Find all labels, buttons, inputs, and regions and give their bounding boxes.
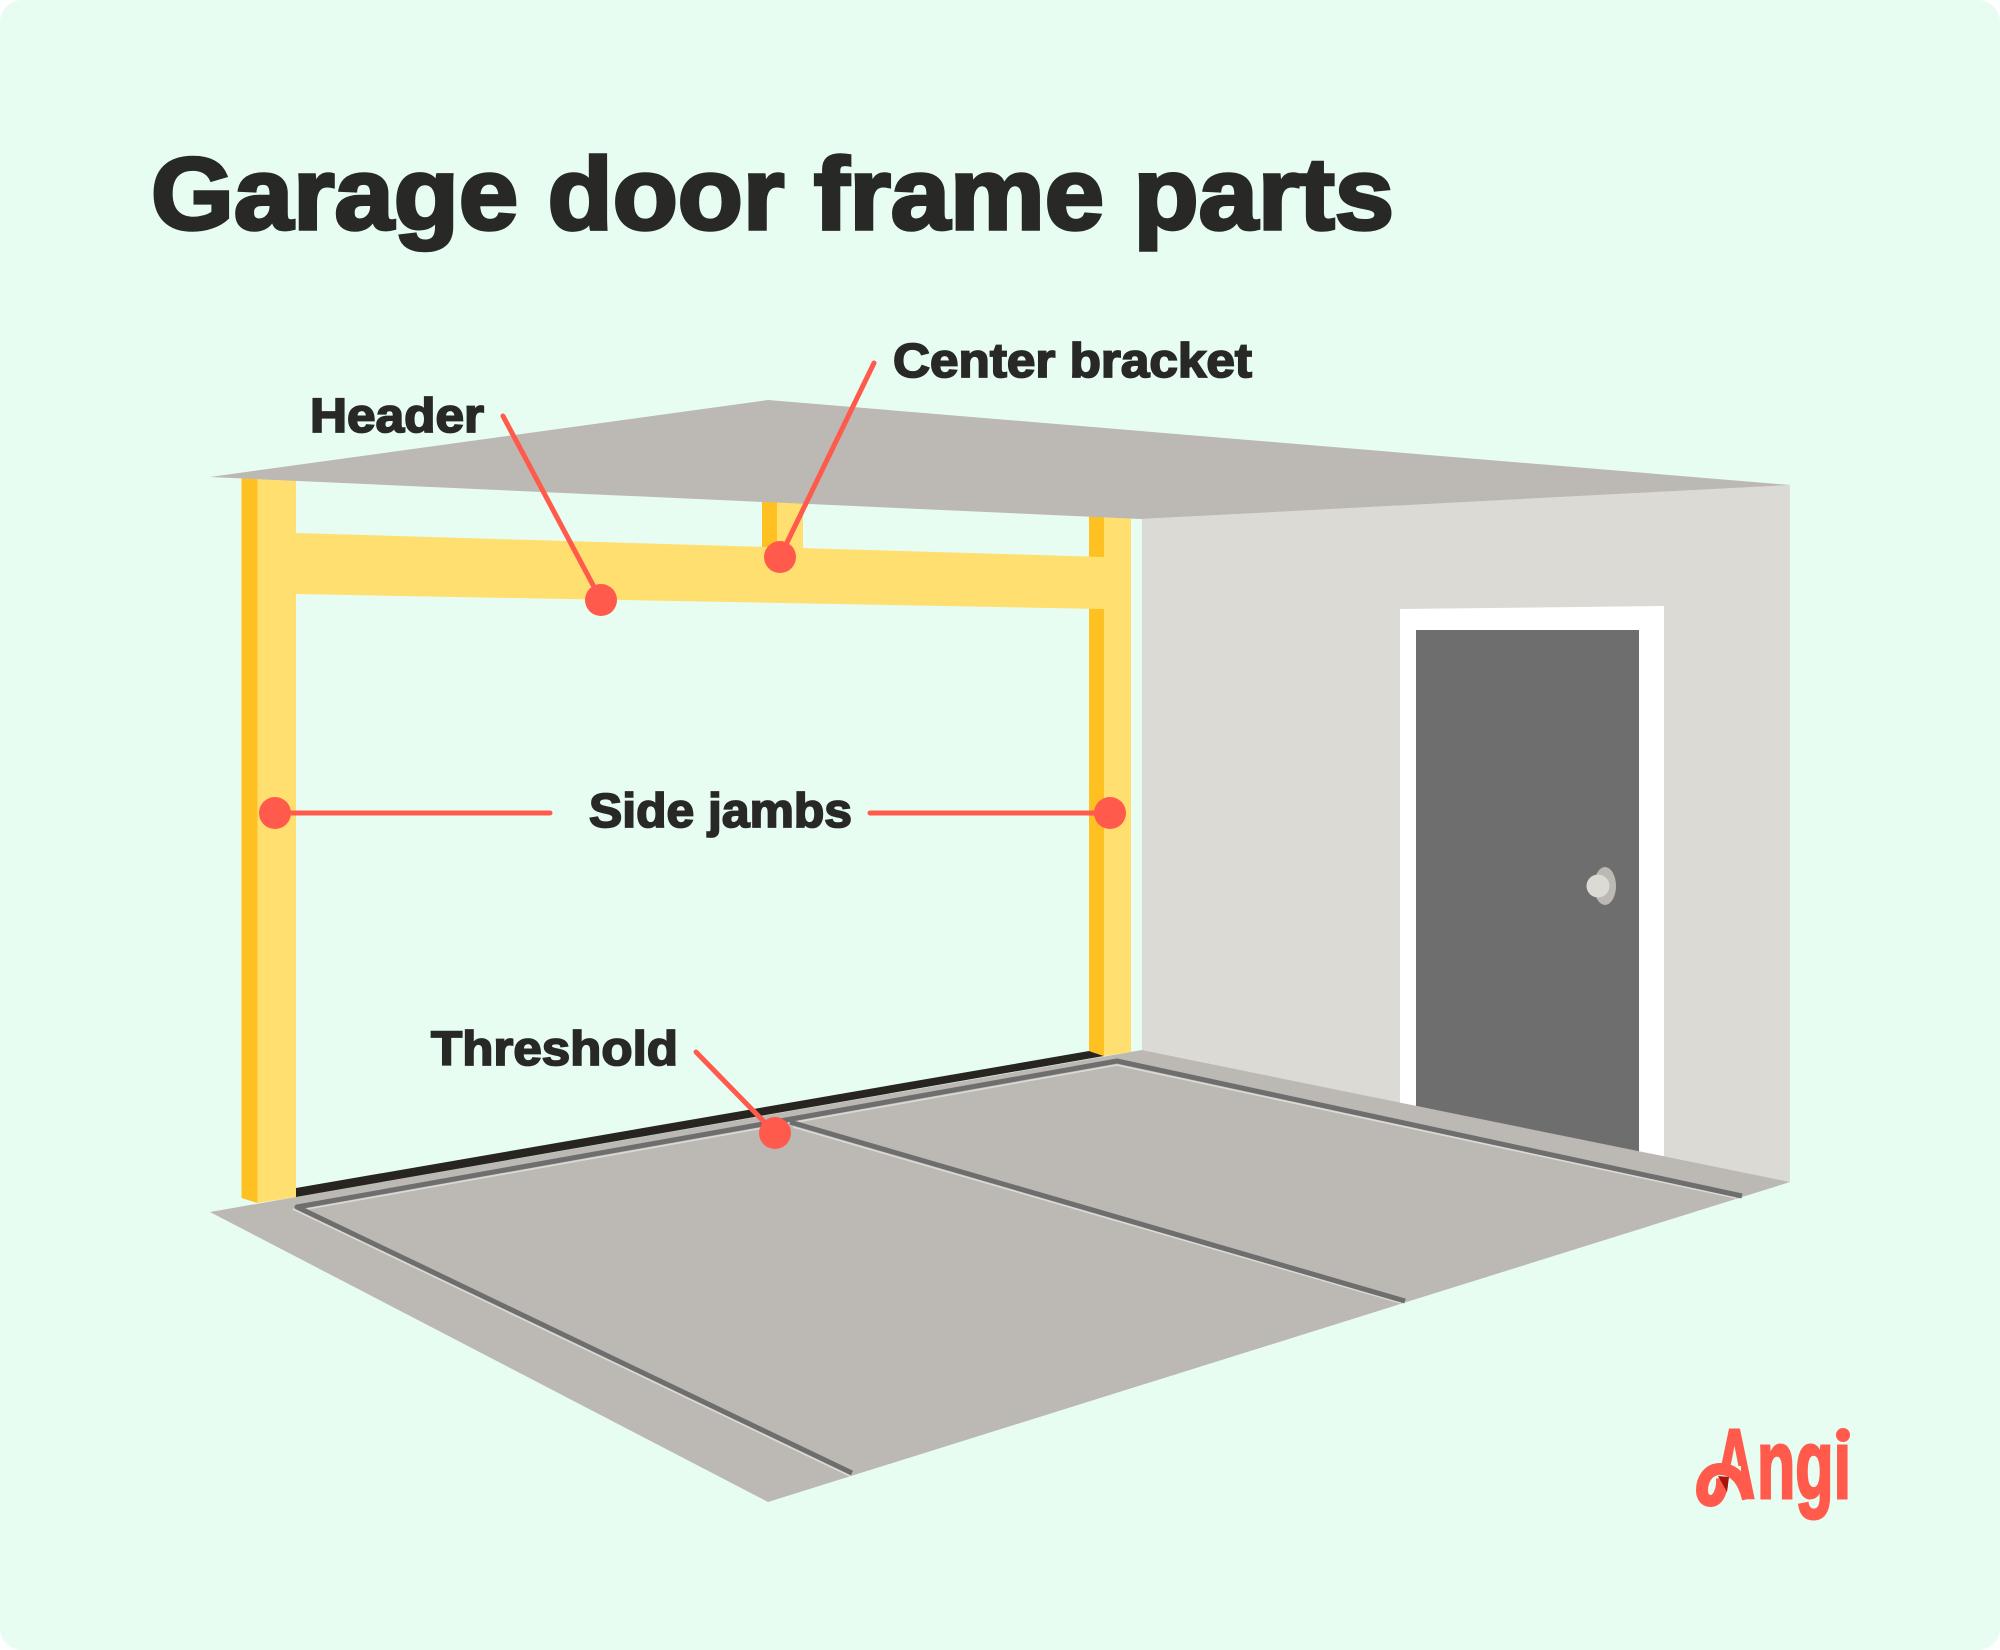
Angi logo: A [1714, 1409, 1755, 1519]
callout: header [310, 390, 617, 616]
door knob [1586, 867, 1616, 905]
left side jamb [242, 478, 296, 1203]
floor light seams [293, 1065, 1736, 1476]
callout: side jambs: Side jambs [589, 785, 852, 838]
Angi logo [1696, 1428, 1850, 1520]
threshold seal [296, 1051, 1104, 1197]
title: Garage door frame parts [151, 137, 1394, 251]
callout: center bracket [764, 335, 1252, 573]
roof [210, 400, 1790, 519]
door panel [1416, 630, 1639, 1153]
right side jamb [1089, 505, 1131, 1056]
floor grooves [297, 1061, 1742, 1473]
side wall [1142, 485, 1790, 1182]
callout: side jambs [259, 785, 1126, 838]
callout: threshold [431, 1023, 791, 1149]
callout: header: Header [310, 390, 484, 443]
Angi logo: ngi [1757, 1409, 1851, 1519]
floor [210, 1050, 1790, 1502]
door frame [1400, 606, 1664, 1160]
garage illustration [210, 400, 1790, 1502]
center bracket [762, 480, 803, 550]
callout: threshold: Threshold [431, 1023, 678, 1076]
interior door [1400, 606, 1664, 1160]
callout: center bracket: Center bracket [893, 335, 1252, 388]
header beam [296, 533, 1131, 610]
